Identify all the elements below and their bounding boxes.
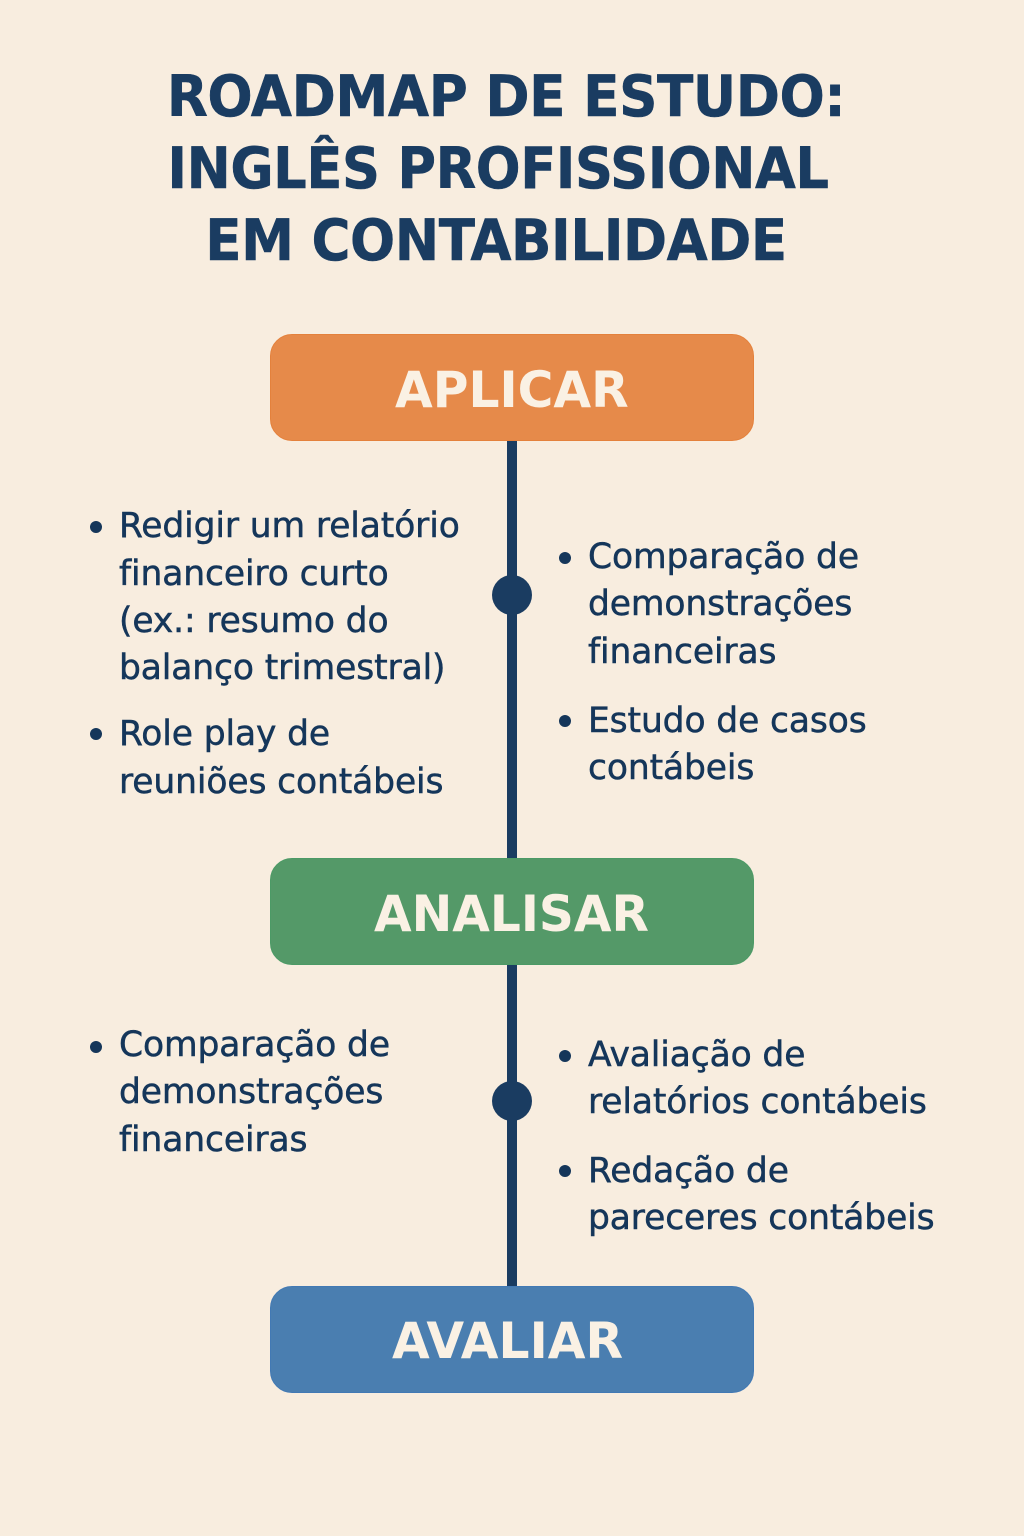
step: Aplicar: APLICAR [395, 361, 629, 419]
step: Avaliar: AVALIAR [391, 1312, 623, 1370]
item: relatório [90, 506, 460, 688]
list: Aplicar right [559, 537, 867, 788]
item: redação: Redação de [588, 1151, 789, 1191]
list: Analisar left: financeiras [119, 1120, 307, 1160]
title: ROADMAP DE ESTUDO: [167, 64, 845, 130]
item: role play: reuniões contábeis [119, 762, 443, 802]
item: avaliação: Avaliação de [588, 1035, 805, 1075]
item: comparação: financeiras [588, 632, 776, 672]
step: Aplicar [270, 334, 754, 441]
item: comparação: demonstrações [588, 584, 852, 624]
title: INGLÊS PROFISSIONAL [167, 136, 829, 202]
title [167, 64, 845, 274]
item: role play: Role play de [119, 714, 330, 754]
list: Aplicar left [90, 506, 460, 802]
item: role play [90, 714, 443, 802]
list: Analisar right [559, 1035, 934, 1238]
item: redação [559, 1151, 934, 1238]
item: relatório: financeiro curto [119, 554, 389, 594]
timeline line lower [507, 964, 517, 1288]
timeline node upper [492, 575, 532, 615]
item: avaliação [559, 1035, 927, 1122]
item: estudo: Estudo de casos [588, 701, 867, 741]
item: comparação [559, 537, 859, 672]
step: Analisar: ANALISAR [373, 885, 648, 943]
item: estudo: contábeis [588, 748, 754, 788]
item: avaliação: relatórios contábeis [588, 1082, 927, 1122]
list: Analisar left [90, 1025, 390, 1160]
item: comparação: Comparação de [588, 537, 859, 577]
list: Analisar left: demonstrações [119, 1072, 383, 1112]
title: EM CONTABILIDADE [205, 208, 787, 274]
item: redação: pareceres contábeis [588, 1198, 934, 1238]
item: relatório: balanço trimestral) [119, 648, 445, 688]
item: relatório: (ex.: resumo do [119, 601, 388, 641]
item: estudo [559, 701, 867, 788]
step: Avaliar [270, 1286, 754, 1393]
step: Analisar [270, 858, 754, 965]
timeline node lower [492, 1081, 532, 1121]
list: Analisar left: Comparação de [119, 1025, 390, 1065]
item: relatório: Redigir um relatório [119, 506, 460, 546]
timeline line upper [507, 440, 517, 860]
